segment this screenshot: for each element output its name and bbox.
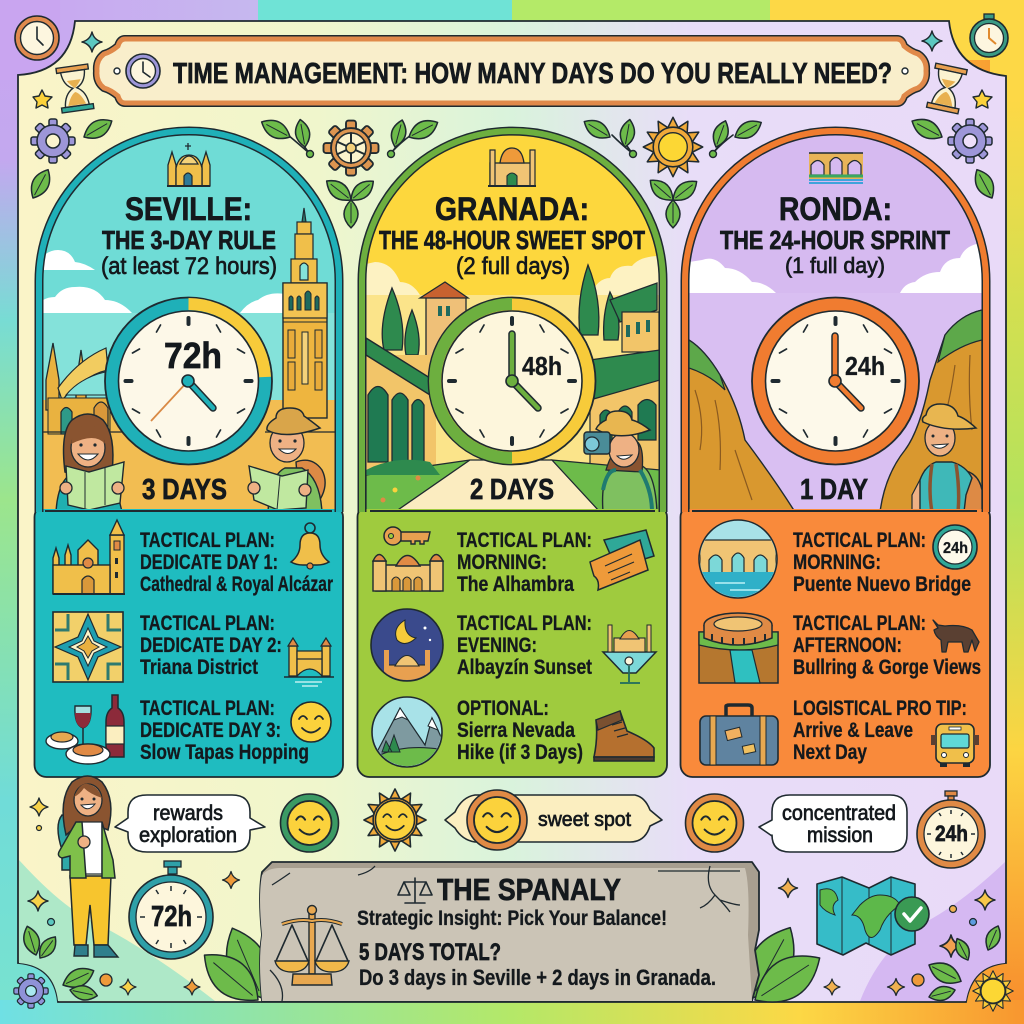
text: Day 2: TACTICAL PLAN: [140,612,275,635]
label: 3 days: 3 DAYS [142,474,227,506]
icon: stopwatch 72h [129,861,213,959]
icon: center orange gear [324,120,378,176]
icon: suitcase [700,705,778,765]
text: Afternoon bullring: Bullring & Gorge Views [793,656,981,679]
icon: green-ring smiley [280,794,338,852]
callout: concentrated mission [759,795,907,852]
panel: Ronda [680,127,990,777]
text: Day 1 [140,529,333,596]
icon: cathedral [167,143,210,186]
clock: 72h: 72h [164,335,222,376]
item: Morning bridge [695,520,977,602]
icon: orange-ring smiley [686,794,744,852]
text: Day 3 [140,697,309,764]
text: Morning bridge: Puente Nuevo Bridge [793,573,971,596]
icon: Granada mosque [488,148,536,186]
heading: The Spanaly: THE SPANALY [437,872,621,907]
callout: concentrated mission: concentrated [782,802,896,825]
text: Evening Albayzin: TACTICAL PLAN: [457,612,592,635]
callout: concentrated mission: mission [807,824,873,847]
text: Day 2 [140,612,282,679]
corner icon: wall clock [15,16,59,60]
text: Evening Albayzin [457,612,592,679]
text: Morning bridge: MORNING: [793,551,881,574]
character: woman with backpack [58,776,118,957]
callout: sweet spot [445,790,662,850]
title clock icon [126,54,160,88]
clock: 24h [752,298,919,464]
text: Afternoon bullring [793,612,981,679]
arch frame [685,131,986,512]
item: Evening Albayzin [371,609,656,685]
icon: mosque on viewpoint [603,625,656,683]
text: Evening Albayzin: Albayzín Sunset [457,656,592,679]
man with hat and map [248,408,325,512]
callout: sweet spot: sweet spot [538,809,631,831]
arch frame [39,131,339,512]
illustration: Granada scene [358,127,667,515]
text: Morning Alhambra: The Alhambra [457,573,574,596]
text: strategic insight: Strategic Insight: Pick Your Balance! [357,907,667,930]
decorative leaves [26,114,999,228]
panel: The Spanaly stone tablet [260,862,759,1001]
icon: mosaic tile [53,612,123,682]
item: Afternoon bullring [699,612,981,683]
text: recommendation: Do 3 days in Seville + 2 days in Granada. [359,965,716,990]
decorative sparkles bottom [28,798,995,996]
text: Optional hike: Sierra Nevada [457,719,575,742]
text: Day 1: DEDICATE DAY 1: [140,551,278,574]
icon: 24h badge: 24h [943,540,968,557]
icon: stopwatch 24h: 24h [935,821,968,846]
text: Day 1: TACTICAL PLAN: [140,529,275,552]
heading: Granada: GRANADA: [435,191,589,227]
item: Day 1 [53,520,333,596]
item: Morning Alhambra [373,527,654,596]
icon: map with check [817,877,929,955]
item: Logistical tip [700,697,979,767]
text: Evening Albayzin: EVENING: [457,634,537,657]
text: Morning Alhambra: TACTICAL PLAN: [457,529,592,552]
icon: golden scales [275,906,349,985]
icon: sun [643,117,703,177]
text: Logistical tip: Next Day [793,741,867,764]
note: Granada: (2 full days) [456,253,570,280]
text: Optional hike [457,697,583,764]
text: Logistical tip [793,697,967,764]
decorative leaves bottom [20,918,1004,1016]
icon: mountains [370,697,445,770]
text: Morning bridge [793,529,971,596]
icon: bridge [284,638,334,686]
callout: rewards exploration: rewards [153,802,223,825]
icon: bell [291,523,329,569]
clock: 48h [428,298,596,464]
panel: Granada [358,127,667,777]
icon: tapas and wine [46,695,124,764]
icon: tickets [590,530,654,590]
clock: 48h: 48h [522,351,562,381]
panel: Seville [34,127,343,777]
text: Optional hike: OPTIONAL: [457,697,549,720]
woman with camera [584,411,657,512]
heading: Ronda: RONDA: [779,191,892,227]
icon: bull [933,620,979,652]
note: Ronda: (1 full day) [785,253,885,278]
corner icon: stopwatch [970,14,1008,57]
item: Optional hike [370,697,654,770]
subheading: Granada: THE 48-HOUR SWEET SPOT [379,225,645,255]
illustration: Seville scene [35,127,343,513]
icon: purple gear right [948,119,992,163]
title banner [97,39,926,103]
icon: corner gear bottom-left [14,974,48,1008]
icon: key and palace [373,527,443,591]
icon: bus [931,724,979,767]
label: 2 days: 2 DAYS [470,474,554,506]
arch frame [362,131,663,512]
icon: stopwatch 72h: 72h [151,901,192,933]
icon: hourglass right [927,63,967,114]
text: Afternoon bullring: TACTICAL PLAN: [793,612,926,635]
decorative sparkles and stars [33,31,992,108]
icon: smiley [291,702,331,742]
icon: cathedral and tower [53,520,125,594]
icon: Ronda bridge [809,153,863,183]
text: Day 3: TACTICAL PLAN: [140,697,275,720]
illustration: Ronda scene [680,127,990,513]
text: Optional hike: Hike (if 3 Days) [457,741,583,764]
text: Day 3: Slow Tapas Hopping [140,741,309,764]
icon: bridge circle [695,520,781,602]
icon: bullring over gorge [699,613,778,683]
icon: purple gear left [31,119,75,163]
note: Seville: (at least 72 hours) [101,253,277,280]
subheading: Ronda: THE 24-HOUR SPRINT [720,225,950,255]
text: Morning Alhambra: MORNING: [457,551,547,574]
text: 5 days total: 5 DAYS TOTAL? [359,939,501,966]
item: Day 2 [53,612,334,686]
subheading: Seville: THE 3-DAY RULE [102,225,276,255]
icon: night view [371,609,443,685]
icon: hiking boot [594,711,654,761]
text: Afternoon bullring: AFTERNOON: [793,634,902,657]
icon: sun smiley [364,789,426,851]
icon: stopwatch 24h [917,791,985,868]
icon: hourglass left [56,64,94,113]
icon: small scale heading [398,878,432,903]
text: Logistical tip: Arrive & Leave [793,719,913,742]
callout: rewards exploration [115,795,265,852]
clock: 24h: 24h [845,351,885,381]
Giralda tower [283,208,327,418]
icon: 24h badge [933,525,977,569]
callout: rewards exploration: exploration [139,824,237,847]
item: Day 3 [46,695,331,764]
text: Morning bridge: TACTICAL PLAN: [793,529,926,552]
text: Day 2: Triana District [140,656,258,679]
label: 1 day: 1 DAY [800,474,868,506]
text: Logistical tip: LOGISTICAL PRO TIP: [793,697,967,720]
man with backpack [912,404,982,512]
text: Day 2: DEDICATE DAY 2: [140,634,282,657]
text: Day 3: DEDICATE DAY 3: [140,719,281,742]
clock: 72h [105,298,272,464]
icon: corner sun bottom-right [973,971,1013,1011]
heading: Seville: SEVILLE: [125,191,252,227]
text: Day 1: Cathedral & Royal Alcázar [140,573,333,596]
woman with map [56,414,124,512]
text: Morning Alhambra [457,529,592,596]
